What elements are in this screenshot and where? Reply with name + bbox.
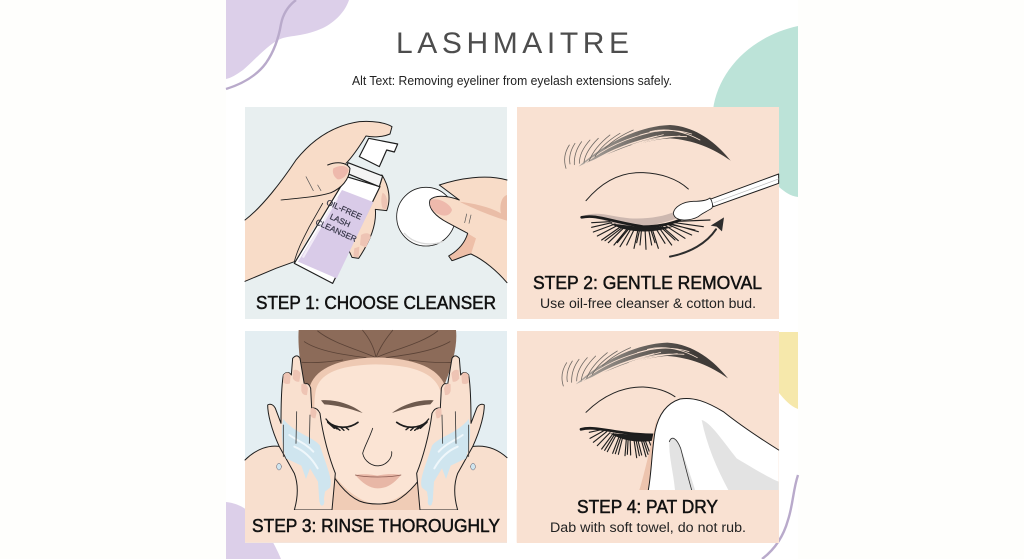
bottle label text	[314, 198, 364, 244]
step 2 description: Use oil-free cleanser & cotton bud.	[540, 296, 756, 311]
illustration: woman rinsing face with water	[245, 330, 507, 543]
decoration: lilac blob bottom left	[226, 502, 281, 559]
subtitle: Alt Text: Removing eyeliner from eyelash extensions safely.	[352, 74, 672, 88]
title: LASHMAITRE	[396, 27, 629, 60]
step 1 heading: STEP 1: CHOOSE CLEANSER	[256, 292, 496, 313]
bottle label text: LASH	[328, 212, 352, 229]
bottle label text: CLEANSER	[314, 218, 358, 244]
step 4 heading: STEP 4: PAT DRY	[577, 496, 718, 517]
step 2 heading: STEP 2: GENTLE REMOVAL	[533, 272, 762, 293]
decoration: mint blob top right	[713, 26, 798, 197]
panel: step 4 pat dry	[517, 331, 779, 543]
decoration: lilac curve bottom right	[762, 475, 798, 559]
decoration: yellow blob right	[779, 332, 798, 409]
step 4 description: Dab with soft towel, do not rub.	[550, 520, 746, 535]
illustration: eye patted with towel	[517, 343, 779, 543]
decoration: lilac curve top left	[226, 0, 296, 89]
panel: step 1 choose cleanser	[245, 107, 507, 319]
decoration: lilac blob top left	[226, 0, 349, 79]
panel: step 3 rinse thoroughly	[245, 330, 507, 543]
step 3 heading: STEP 3: RINSE THOROUGHLY	[252, 515, 500, 536]
bottle label text: OIL-FREE	[325, 198, 364, 222]
panel: step 2 gentle removal	[517, 107, 779, 319]
illustration: hands with cleanser bottle and cotton pad	[245, 121, 507, 283]
illustration: eye with cotton bud	[565, 125, 779, 257]
